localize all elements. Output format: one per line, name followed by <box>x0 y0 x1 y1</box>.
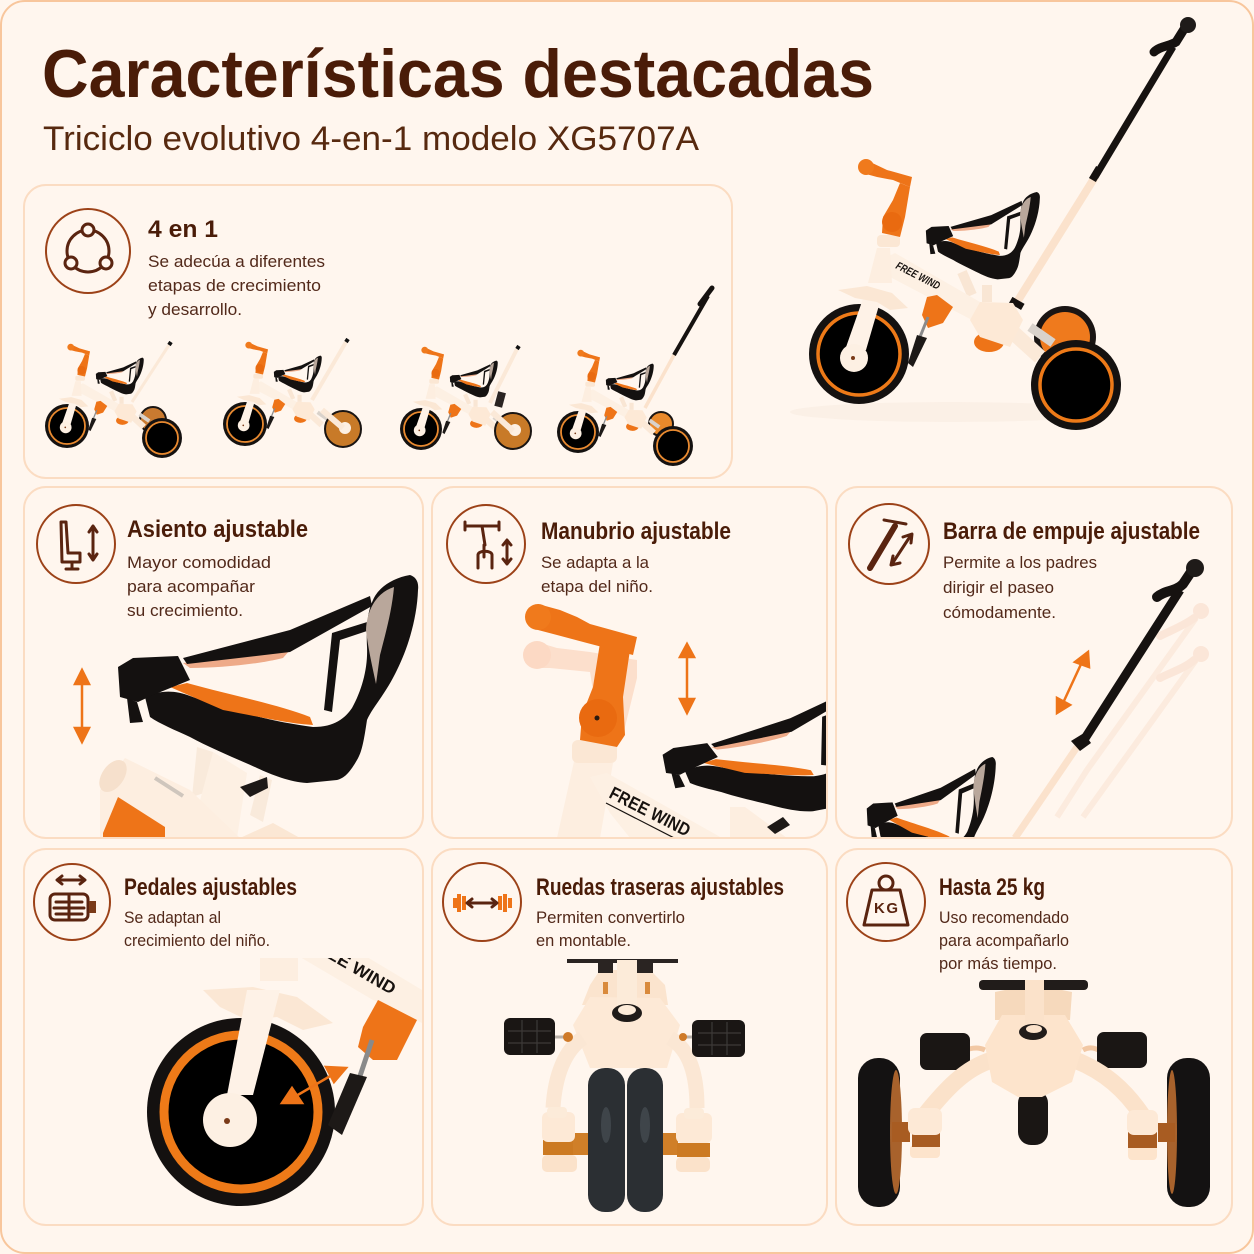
icon: three connected circles <box>46 209 130 293</box>
panel: Pedales ajustables <box>24 849 423 1225</box>
description: etapas de crecimiento <box>148 276 321 295</box>
arrow: up and down <box>75 670 89 742</box>
description: para acompañar <box>127 577 255 596</box>
arrow: diagonal <box>282 1067 346 1103</box>
description: crecimiento del niño. <box>124 931 270 950</box>
trike mode 4 <box>557 288 712 466</box>
trike mode 2 <box>223 339 361 447</box>
description <box>939 908 1069 973</box>
description <box>127 553 271 620</box>
panel: Ruedas traseras ajustables <box>432 849 827 1225</box>
arrow: up and down <box>680 644 694 713</box>
description <box>124 908 270 950</box>
description <box>943 553 1097 622</box>
description: Se adaptan al <box>124 908 221 927</box>
description: cómodamente. <box>943 603 1056 622</box>
description <box>148 252 325 319</box>
front view photo <box>858 980 1210 1207</box>
description: dirigir el paseo <box>943 578 1054 597</box>
icon: dumbbell arrow <box>443 863 521 941</box>
description: Mayor comodidad <box>127 553 271 572</box>
description: Se adapta a la <box>541 553 650 572</box>
heading: Pedales ajustables <box>124 874 297 901</box>
handlebar close-up photo <box>523 604 826 837</box>
icon: push bar with arrow <box>849 504 929 584</box>
heading: 4 en 1 <box>148 216 218 243</box>
heading: Asiento ajustable <box>127 516 308 543</box>
description: Permite a los padres <box>943 553 1097 572</box>
description: por más tiempo. <box>939 954 1057 973</box>
description <box>541 553 653 596</box>
title: Características destacadas <box>42 36 874 112</box>
wheel and pedal close-up photo: FREE WIND <box>303 932 399 998</box>
arrow: diagonal <box>1057 652 1089 713</box>
trike mode 3 <box>400 346 531 450</box>
description: para acompañarlo <box>939 931 1069 950</box>
wheel and pedal close-up photo <box>147 932 422 1206</box>
handlebar close-up photo: FREE WIND <box>606 783 694 841</box>
icon: pedal with arrow <box>34 864 110 940</box>
description: Se adecúa a diferentes <box>148 252 325 271</box>
icon: weight KG: KG <box>874 900 898 917</box>
icon: handlebar with arrow <box>447 505 525 583</box>
rear wheels close-up photo <box>504 959 745 1212</box>
heading: Barra de empuje ajustable <box>943 518 1200 545</box>
description: en montable. <box>536 931 631 950</box>
subtitle: Triciclo evolutivo 4-en-1 modelo XG5707A <box>43 120 699 158</box>
panel: Barra de empuje ajustable <box>836 487 1232 873</box>
panel: 4 en 1 <box>24 185 732 478</box>
seat close-up photo <box>94 575 418 838</box>
icon: weight KG <box>847 863 925 941</box>
heading: Ruedas traseras ajustables <box>536 874 784 901</box>
panel: Manubrio ajustable <box>431 486 828 839</box>
description <box>536 908 685 950</box>
panel: Asiento ajustable <box>24 487 423 838</box>
trike mode 1 <box>45 342 182 458</box>
description: etapa del niño. <box>541 577 653 596</box>
description: su crecimiento. <box>127 601 243 620</box>
push bar close-up photo <box>866 559 1209 837</box>
icon: seat with arrow <box>37 505 115 583</box>
panel: Hasta 25 kg <box>836 849 1232 1225</box>
hero product: tricycle with push bar: FREE WIND <box>894 260 942 292</box>
description: y desarrollo. <box>148 300 242 319</box>
heading: Manubrio ajustable <box>541 518 731 545</box>
description: Permiten convertirlo <box>536 908 685 927</box>
heading: Hasta 25 kg <box>939 874 1045 901</box>
description: Uso recomendado <box>939 908 1069 927</box>
hero product: tricycle with push bar <box>790 17 1196 430</box>
